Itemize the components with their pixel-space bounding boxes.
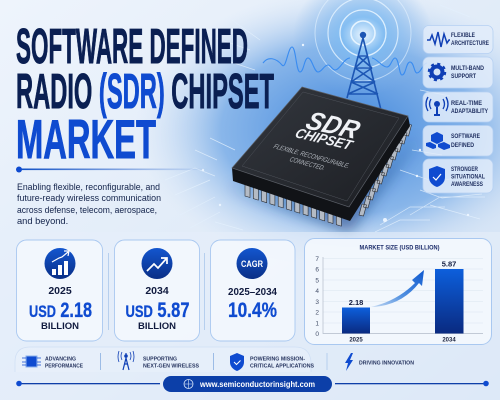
y axis labels: 2 (315, 310, 319, 316)
intro text: future-ready wireless communication (17, 193, 161, 203)
chip label: CHIPSET (293, 125, 356, 153)
website pill (163, 376, 332, 392)
feature: stronger situational awareness: AWARENESS (451, 181, 484, 188)
benefit: mission-critical applications (230, 353, 314, 371)
benefit: next-gen wireless (118, 351, 199, 370)
divider (204, 253, 205, 330)
feature: stronger situational awareness (423, 159, 493, 193)
bar: 2025: 2.18 (349, 298, 363, 307)
feature: stronger situational awareness: SITUATIONAL (451, 174, 485, 180)
bar: 2034: 5.87 (442, 260, 456, 268)
benefit: driving innovation (345, 353, 414, 371)
chip label: SDR (302, 106, 365, 144)
feature: multi-band support (423, 57, 493, 88)
bar: 2025 (342, 298, 370, 344)
icon: CAGR badge: CAGR (241, 259, 263, 269)
benefit: mission-critical applications: CRITICAL APPLICATIONS (250, 364, 314, 370)
y axis labels (315, 256, 319, 338)
y axis labels: 0 (315, 331, 319, 338)
stat card: 2025: BILLION (41, 321, 79, 332)
feature: multi-band support: MULTI-BAND (451, 65, 484, 72)
bar: 2034: 2034 (442, 338, 456, 344)
y axis labels: 4 (315, 288, 319, 295)
footer rule left (16, 381, 160, 386)
chart title: MARKET SIZE (USD BILLION) (360, 244, 440, 252)
intro text: and beyond. (17, 216, 68, 226)
stat card: 2034: BILLION (138, 321, 176, 332)
benefit: advancing performance (22, 356, 83, 370)
icon: radio tower (347, 32, 381, 110)
feature: real-time adaptability (423, 92, 493, 122)
y axis labels: 1 (315, 320, 319, 328)
bar: 2034 (435, 260, 464, 344)
stat card: 2034: 2034 (145, 285, 169, 297)
stat card: CAGR (210, 240, 295, 341)
chip label: CONNECTED. (288, 156, 326, 172)
y axis labels: 7 (315, 256, 319, 263)
chip (232, 87, 412, 226)
icon: trend arrow (142, 248, 172, 279)
feature: stronger situational awareness: STRONGER (451, 166, 478, 173)
feature: real-time adaptability: REAL-TIME (451, 100, 483, 107)
icon: rising bars (44, 248, 76, 279)
y axis labels: 3 (315, 299, 319, 306)
feature: flexible architecture (423, 26, 493, 54)
bar: 2025: 2025 (349, 338, 363, 344)
panel: benefits strip (15, 347, 414, 372)
feature: real-time adaptability: ADAPTABILITY (451, 108, 489, 115)
chip pins (245, 124, 412, 226)
title: RADIO (SDR) CHIPSET (16, 65, 274, 119)
footer rule right (335, 381, 489, 386)
feature: multi-band support: SUPPORT (451, 73, 476, 80)
intro text (17, 182, 161, 226)
stat card: 2025: 2025 (48, 285, 72, 297)
y axis labels: 6 (315, 266, 319, 274)
stat card: 2034 (114, 240, 200, 341)
y axis labels: 5 (315, 278, 319, 284)
benefit: driving innovation: DRIVING INNOVATION (359, 360, 414, 366)
stat card: 2034: USD 5.87 (126, 299, 190, 322)
title: MARKET (16, 109, 156, 170)
benefit: advancing performance: PERFORMANCE (45, 364, 83, 370)
radio waves and signal rings (263, 0, 427, 81)
benefit: next-gen wireless: NEXT-GEN WIRELESS (143, 364, 199, 370)
benefit: next-gen wireless: SUPPORTING (143, 356, 177, 362)
panel: market size chart (304, 238, 492, 344)
growth arrow (371, 270, 424, 307)
feature: software defined: SOFTWARE (451, 133, 481, 140)
stat card: 2025 (16, 240, 102, 341)
feature: software defined: DEFINED (451, 142, 474, 149)
website pill: www.semiconductorinsight.com (199, 380, 315, 389)
feature: software defined (423, 126, 493, 156)
chip label (272, 106, 365, 172)
title (16, 20, 274, 170)
stat card: CAGR: 10.4% (228, 299, 277, 322)
benefit: mission-critical applications: POWERING MISSION- (250, 356, 305, 362)
stat card: CAGR: 2025–2034 (228, 287, 277, 298)
benefit: advancing performance: ADVANCING (45, 356, 76, 362)
intro text: across defense, telecom, aerospace, (17, 205, 157, 215)
chip label: FLEXIBLE. RECONFIGURABLE. (272, 143, 351, 170)
feature: flexible architecture: FLEXIBLE (451, 32, 476, 39)
divider (108, 253, 109, 330)
title rule (16, 166, 209, 172)
stat card: 2025: USD 2.18 (29, 299, 92, 322)
panel: feature list (423, 26, 493, 193)
intro text: Enabling flexible, reconfigurable, and (17, 182, 160, 192)
